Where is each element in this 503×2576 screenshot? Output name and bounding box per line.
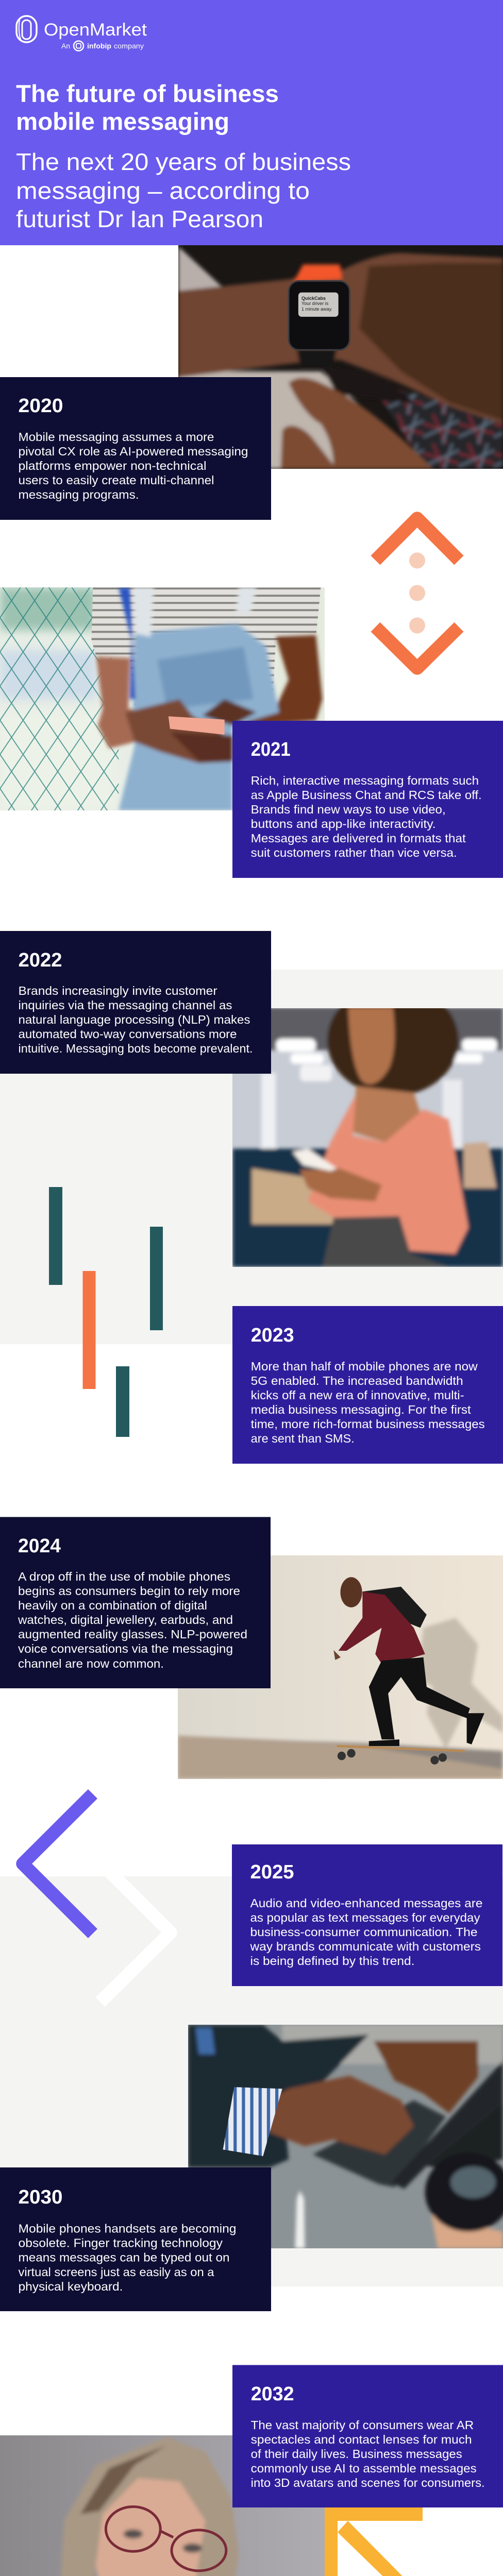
text: 2023 prediction: media business messaging. For the first [251,1403,471,1416]
photo: older woman with red glasses [0,2435,325,2576]
photo: skateboarder [178,1555,503,1779]
text: 2024 prediction: heavily on a combination of digital [18,1599,207,1612]
text: 2023 prediction: are sent than SMS. [251,1432,355,1445]
year 2024: 2024 [18,1535,61,1557]
text: 2032 prediction: spectacles and contact lenses for much [251,2433,472,2446]
text: 2025 prediction: business-consumer communication. The [250,1925,477,1939]
photo: person in denim overalls using phone by fence [0,587,325,811]
text: 2030 prediction: virtual screens just as easily as on a [19,2265,214,2279]
text: 2024 prediction: augmented reality glasses. NLP-powered [18,1628,247,1641]
panel: 2025 [232,1844,502,1986]
icon: OpenMarket logo mark [16,16,37,42]
logo wordmark: OpenMarket [44,20,147,40]
year 2022: 2022 [19,950,62,971]
text: 2021 prediction: buttons and app-like interactivity. [251,817,436,831]
title: The future of business [16,80,279,107]
text: 2032 prediction [251,2418,485,2489]
panel: 2032 [232,2365,503,2507]
text: 2020 prediction: platforms empower non-technical [19,459,206,472]
text: 2022 prediction: inquiries via the messaging channel as [19,998,232,1012]
text: 2025 prediction: way brands communicate with customers [249,1940,481,1953]
text: 2024 prediction: A drop off in the use of mobile phones [18,1570,230,1583]
panel: 2022 [0,931,271,1074]
watch notification text: Your driver is [301,301,329,306]
text: 2021 prediction: suit customers rather than vice versa. [251,846,457,859]
panel: 2024 [0,1517,271,1688]
text: 2022 prediction: natural language processing (NLP) makes [19,1013,250,1026]
text: 2022 prediction: intuitive. Messaging bots become prevalent. [19,1042,253,1055]
subtitle [16,148,351,232]
panel: 2023 [232,1306,503,1464]
logo tagline [61,41,144,50]
text: 2032 prediction: of their daily lives. Business messages [251,2447,462,2461]
photo: woman in coral sweater reading phone [232,985,503,1267]
title: mobile messaging [16,108,229,135]
title [16,80,279,135]
text: 2020 prediction: pivotal CX role as AI-powered messaging [19,445,248,458]
text: 2020 prediction: Mobile messaging assumes a more [19,430,214,444]
text: 2030 prediction: Mobile phones handsets are becoming [19,2222,236,2235]
year 2032: 2032 [251,2383,294,2405]
text: 2025 prediction [249,1896,482,1968]
photo: hands typing on tablet keyboard [188,2025,503,2248]
text: 2030 prediction: means messages can be typed out on [19,2250,230,2264]
year 2023: 2023 [251,1325,294,1346]
background panel: light grey band 2025-2030 [0,1876,503,2286]
logo tagline: An [61,42,70,50]
text: 2025 prediction: Audio and video-enhanced messages are [250,1896,482,1910]
text: 2032 prediction: commonly use AI to assemble messages [251,2462,477,2475]
logo tagline: company [114,42,144,50]
watch notification text: QuickCabs [301,296,326,301]
text: 2022 prediction [19,984,253,1055]
text: 2023 prediction: More than half of mobile phones are now [251,1360,478,1373]
logo tagline: infobip [87,42,111,50]
background panel: light grey band 2022-2023 [0,970,503,1344]
text: 2032 prediction: The vast majority of consumers wear AR [251,2418,474,2432]
panel: 2020 [0,377,271,520]
icon: yellow diagonal arrow [325,2507,423,2576]
text: 2025 prediction: as popular as text messages for everyday [250,1911,480,1924]
text: 2030 prediction: obsolete. Finger tracking technology [19,2236,223,2249]
icon: white right chevron [100,1862,171,2002]
text: 2023 prediction: time, more rich-format business messages [251,1417,485,1431]
text: 2020 prediction [19,430,248,501]
text: 2025 prediction: is being defined by this trend. [250,1954,414,1968]
graphic: vertical teal and orange bars [49,1187,163,1437]
text: 2021 prediction: Messages are delivered in formats that [251,832,466,845]
text: 2024 prediction [18,1570,247,1670]
text: 2021 prediction: Rich, interactive messaging formats such [251,774,479,787]
watch notification text [301,296,332,312]
text: 2020 prediction: messaging programs. [19,488,139,501]
text: 2022 prediction: automated two-way conversations more [19,1027,237,1041]
text: 2023 prediction: 5G enabled. The increased bandwidth [251,1374,463,1387]
text: 2030 prediction: physical keyboard. [19,2280,123,2293]
text: 2024 prediction: begins as consumers begin to rely more [18,1584,240,1598]
photo: smartwatch on wrist [178,245,503,469]
year 2030: 2030 [19,2187,63,2208]
year 2025: 2025 [250,1861,294,1883]
text: 2024 prediction: voice conversations via the messaging [18,1642,233,1655]
panel: 2021 [232,721,503,878]
text: 2030 prediction [19,2222,236,2293]
text: 2021 prediction: Brands find new ways to use video, [251,803,446,816]
panel: 2030 [0,2167,271,2311]
text: 2023 prediction: kicks off a new era of innovative, multi- [251,1388,464,1402]
text: 2020 prediction: users to easily create multi-channel [19,473,214,487]
watch notification text: 1 minute away. [301,307,332,312]
subtitle: The next 20 years of business [16,148,351,175]
year 2021: 2021 [251,739,291,760]
text: 2022 prediction: Brands increasingly invite customer [19,984,217,997]
header banner [0,0,503,245]
text: 2023 prediction [251,1360,485,1445]
text: 2021 prediction: as Apple Business Chat and RCS take off. [251,788,482,802]
text: 2032 prediction: into 3D avatars and scenes for consumers. [251,2476,485,2489]
text: 2021 prediction [251,774,482,859]
icon: orange chevrons with dots [375,518,459,668]
text: 2024 prediction: channel are now common. [18,1657,164,1670]
text: 2024 prediction: watches, digital jewellery, earbuds, and [18,1613,233,1626]
year 2020: 2020 [19,395,63,417]
subtitle: futurist Dr Ian Pearson [16,206,263,232]
icon: purple left chevron [23,1794,93,1934]
subtitle: messaging – according to [16,177,310,204]
